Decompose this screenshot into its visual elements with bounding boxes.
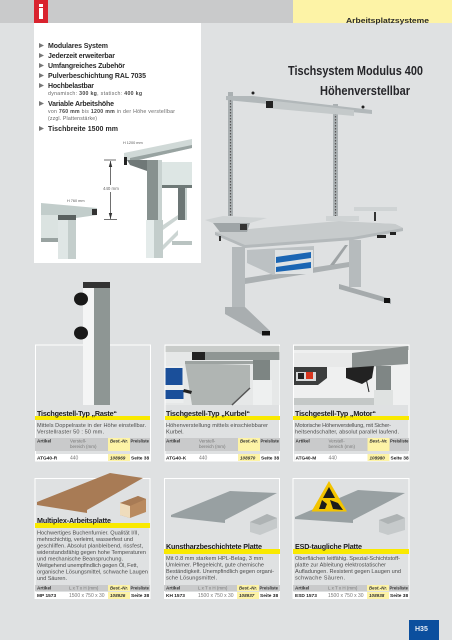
card: Motor: Motorische Höhenverstellung, mit Sicher- xyxy=(295,423,391,429)
table: Best.-Nr. xyxy=(370,438,388,444)
card: Kurbel: Kurbel. xyxy=(166,430,184,436)
card: ESD: Oberflächen leitfähig. Spezial-Schichtstoff- xyxy=(295,556,400,562)
card: ESD: platte zur Ableitung elektrostatischer xyxy=(295,562,386,568)
feature list: Variable Arbeitshöhe xyxy=(48,101,114,108)
desk frame xyxy=(225,240,391,336)
table: MP 1573 xyxy=(37,593,56,599)
table: 108938 xyxy=(369,593,385,598)
table xyxy=(293,585,409,599)
table xyxy=(35,585,150,599)
page number badge xyxy=(409,620,439,640)
table: Seite 38 xyxy=(260,593,278,599)
feature list: Umfangreiches Zubehör xyxy=(48,63,125,70)
icon: ESD warning triangle xyxy=(312,481,347,512)
table: Artikel xyxy=(295,586,309,591)
feature list: dynamisch: 300 kg, statisch: 400 kg xyxy=(48,91,142,97)
feature list: Tischbreite 1500 mm xyxy=(48,126,118,133)
feature list: Modulares System xyxy=(48,43,108,50)
feature list: Jederzeit erweiterbar xyxy=(48,53,115,60)
card: Kurbel xyxy=(165,345,280,462)
table: Preisliste xyxy=(390,438,409,444)
table: Best.-Nr. xyxy=(369,586,387,591)
card: Kunstharz xyxy=(164,478,280,599)
table: Artikel xyxy=(166,586,180,591)
table: Seite 38 xyxy=(131,593,149,599)
table: 108926 xyxy=(110,593,126,598)
card: ESD: schwache Säuren. xyxy=(295,576,345,582)
feature list: Pulverbeschichtung RAL 7035 xyxy=(48,73,146,80)
table: 440 xyxy=(328,456,337,462)
table: L x T x H (mm) xyxy=(198,586,228,591)
card: Multiplex: geschliffen. Absolut planbleibend, rissfest, xyxy=(37,544,143,550)
table: 1500 x 750 x 30 xyxy=(69,593,105,599)
table xyxy=(165,438,280,462)
card: Multiplex: organische Lösungsmittel, schwache Laugen xyxy=(37,570,148,576)
card: Motor: heitsendschalter, absolut parallel laufend. xyxy=(295,430,399,436)
card: Multiplex: und mechanische Beanspruchung. xyxy=(37,556,123,562)
table: bereich (mm) xyxy=(328,444,356,449)
main title: Höhenverstellbar xyxy=(320,83,410,98)
shelves xyxy=(205,207,397,241)
card: Kunstharz: Beständigkeit. Unempfindlich gegen organi- xyxy=(166,569,274,575)
card: Kurbel: Höhenverstellung mittels einschiebbarer xyxy=(166,423,268,429)
feature list xyxy=(39,43,175,133)
drawer unit xyxy=(247,246,314,275)
desk top xyxy=(215,222,403,248)
table: KH 1573 xyxy=(166,593,185,599)
photo: crank xyxy=(166,346,280,405)
table xyxy=(35,438,150,462)
main title xyxy=(288,63,423,98)
card: ESD xyxy=(293,478,409,599)
card: Multiplex: und Säuren. xyxy=(37,576,67,582)
table: Best.-Nr. xyxy=(110,586,128,591)
dimension arrow: 440 mm: 440 mm xyxy=(103,186,119,191)
card: ESD: ESD-taugliche Platte xyxy=(295,542,362,551)
card: Multiplex: mehrschichtig, verleimt, wasserfest und xyxy=(37,537,133,543)
table: Preisliste xyxy=(130,438,149,444)
photo: wood plate and sample xyxy=(37,473,146,518)
table: bereich (mm) xyxy=(199,444,226,449)
table: Artikel xyxy=(296,438,310,444)
table: Preisliste xyxy=(130,586,149,591)
page number badge: H35 xyxy=(415,626,428,633)
table: 440 xyxy=(199,456,208,462)
uprights and overhead rail xyxy=(226,92,372,220)
table xyxy=(294,438,409,462)
card: ESD: Aufladungen. Resistent gegen Laugen und xyxy=(295,569,401,575)
dimension label: H 1200 mm: H 1200 mm xyxy=(123,141,143,145)
table: bereich (mm) xyxy=(70,444,97,449)
card: Kunstharz: Kunstharzbeschichtete Platte xyxy=(166,542,262,551)
card: Multiplex: widerstandsfähig gegen hohe Temperaturen xyxy=(36,550,146,556)
card: Kurbel: Tischgestell-Typ „Kurbel“ xyxy=(166,409,250,418)
dimension arrow: 440 mm xyxy=(101,160,120,220)
table: L x T x H (mm) xyxy=(328,586,358,591)
table: ATG40-K xyxy=(166,456,187,462)
card: Multiplex: Weitgehend unempfindlich gegen Öl, Fett, xyxy=(37,562,138,569)
main title: Tischsystem Modulus 400 xyxy=(288,63,423,78)
card: Kunstharz: sche Lösungsmittel. xyxy=(166,576,217,582)
table: 1500 x 750 x 30 xyxy=(328,593,364,599)
table: Preisliste xyxy=(260,438,279,444)
table: Best.-Nr. xyxy=(110,438,128,444)
table: L x T x H (mm) xyxy=(69,586,99,591)
table: ESD 1573 xyxy=(295,593,317,599)
photo: Raste column xyxy=(74,282,110,405)
photo: ESD plate and sample xyxy=(295,490,405,535)
table: Best.-Nr. xyxy=(240,438,258,444)
header band xyxy=(0,0,452,23)
card: Multiplex xyxy=(35,473,150,599)
table: Artikel xyxy=(166,438,180,444)
dimension label: H 760 mm: H 760 mm xyxy=(67,199,85,203)
table xyxy=(164,585,280,599)
table: Seite 38 xyxy=(261,456,279,462)
feature list: (zzgl. Plattenstärke) xyxy=(48,116,97,122)
feature list: Hochbelastbar xyxy=(48,83,94,90)
table: 108969 xyxy=(110,456,126,460)
feature list: von 760 mm bis 1200 mm in der Höhe verstellbar xyxy=(48,109,175,115)
table: Artikel xyxy=(37,586,51,591)
table: Verstell- xyxy=(70,438,87,444)
diagram: high desk position xyxy=(124,139,192,258)
main product photo: height adjustable desk xyxy=(205,92,403,336)
card: Motor: Tischgestell-Typ „Motor“ xyxy=(295,409,376,418)
section heading: Arbeitsplatzsysteme xyxy=(346,16,429,25)
card: Multiplex: Multiplex-Arbeitsplatte xyxy=(37,516,111,525)
card: Kunstharz: Umleimer. Pflegeleicht, gute chemische xyxy=(166,562,264,568)
icon: red info tab xyxy=(34,0,48,23)
card: Motor xyxy=(293,345,409,462)
card: Multiplex: Hochwertiges Buchenfurnier. Qualität I/II, xyxy=(37,530,139,536)
card: Raste: Mittels Doppelraste in der Höhe einstellbar. xyxy=(37,423,146,429)
table: ATG40-M xyxy=(296,456,316,462)
photo: laminate plate and sample xyxy=(171,491,277,535)
diagram: low desk position xyxy=(41,203,97,259)
table: Seite 38 xyxy=(390,456,409,462)
card: Raste: Verstellraster 50 : 50 mm. xyxy=(37,430,104,436)
table: 440 xyxy=(70,456,79,462)
table: Artikel xyxy=(37,438,51,444)
table: Verstell- xyxy=(328,438,345,444)
table: Seite 38 xyxy=(131,456,149,462)
table: 108980 xyxy=(370,456,385,460)
table: Seite 38 xyxy=(390,593,408,599)
table: 108937 xyxy=(239,593,255,598)
table: 1500 x 750 x 30 xyxy=(198,593,234,599)
table: ATG40-R xyxy=(37,456,58,462)
card: Raste: Tischgestell-Typ „Raste“ xyxy=(37,409,117,418)
table: Preisliste xyxy=(260,586,278,591)
panel: feature list and height diagram xyxy=(34,23,201,263)
table: Verstell- xyxy=(199,438,216,444)
card: Raste xyxy=(35,282,150,462)
table: Best.-Nr. xyxy=(239,586,257,591)
table: 108970 xyxy=(240,456,256,460)
photo: motor xyxy=(294,346,409,405)
card: Kunstharz: Mit 0.8 mm starkem HPL-Belag, 3 mm xyxy=(166,556,263,562)
table: Preisliste xyxy=(390,586,408,591)
